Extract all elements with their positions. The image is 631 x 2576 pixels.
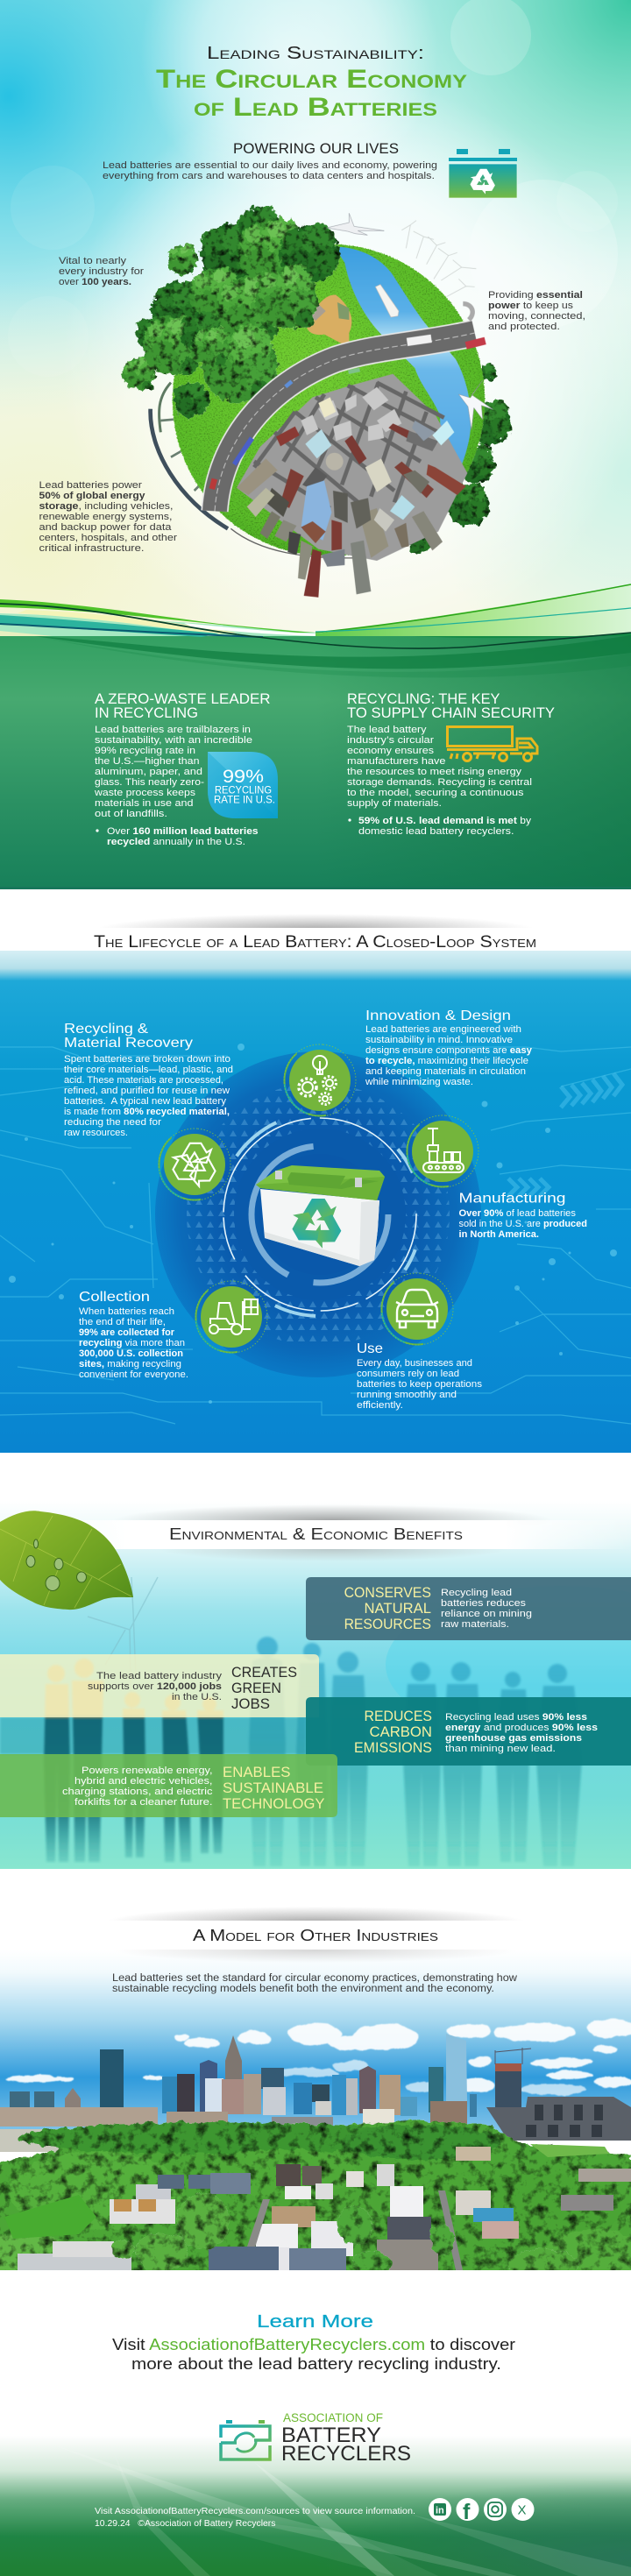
panel: conserves natural resources: reliance on mining (441, 1609, 532, 1619)
forest (123, 207, 339, 418)
text: manufacturing: in North America. (459, 1229, 539, 1240)
text: innovation and design: sustainability in mind. Innovative (365, 1035, 513, 1045)
panel: conserves natural resources: CONSERVES (344, 1584, 431, 1601)
callout: global energy storage (39, 480, 177, 554)
text: recycling and material recovery: Material Recovery (64, 1036, 193, 1051)
text: manufacturing: Manufacturing (459, 1192, 566, 1206)
logo: association of battery recyclers: BATTERY (281, 2424, 381, 2447)
callout: global energy storage: centers, hospitals, and other (39, 533, 177, 543)
text: innovation and design: to recycle, maximizing their lifecycle (365, 1056, 528, 1066)
text: recycling and material recovery: acid. These materials are processed, (64, 1075, 223, 1086)
callout: global energy storage: Lead batteries power (39, 480, 142, 491)
diagram: closed-loop ring (155, 1051, 481, 1377)
circuit nodes (9, 1044, 617, 1404)
icon: instagram (484, 2498, 507, 2521)
heading (95, 691, 271, 721)
text block: powering intro: Lead batteries are essential to our daily lives and economy, powering (103, 160, 437, 171)
body text: Lead batteries are trailblazers in (95, 725, 251, 735)
panel: conserves natural resources: raw materials. (441, 1619, 509, 1630)
node: manufacturing (397, 1106, 488, 1197)
panel: reduces carbon emissions: than mining new lead. (445, 1744, 556, 1754)
icon: conveyor (423, 1129, 464, 1172)
heading: IN RECYCLING (95, 705, 198, 721)
callout: essential power: Providing essential (488, 290, 583, 301)
text: manufacturing (459, 1192, 587, 1240)
source note: Visit AssociationofBatteryRecyclers.com/sources to view source information. (95, 2507, 415, 2516)
rail viaduct (151, 383, 362, 558)
callout: essential power (488, 290, 585, 332)
panel: enables sustainable technology: Powers renewable energy, (82, 1766, 212, 1776)
node: innovation and design (274, 1035, 365, 1126)
call to action (112, 2335, 515, 2373)
text: collection: When batteries reach (79, 1306, 174, 1317)
node: recycling (149, 1119, 240, 1210)
call to action: Visit AssociationofBatteryRecyclers.com to discover (112, 2335, 515, 2353)
callout: essential power: power to keep us (488, 301, 574, 311)
panel: reduces carbon emissions: greenhouse gas emissions (445, 1733, 582, 1744)
panel: creates green jobs: GREEN (231, 1680, 281, 1696)
body text: economy ensures (347, 746, 435, 756)
text: collection: convenient for everyone. (79, 1369, 188, 1380)
road vehicles (209, 335, 486, 490)
text: innovation and design: while minimizing waste. (365, 1077, 473, 1087)
callout: global energy storage: and backup power for data (39, 522, 173, 533)
logo: association of battery recyclers (221, 2411, 411, 2466)
callout: global energy storage: critical infrastructure. (39, 543, 144, 554)
text: collection: recycling via more than (79, 1338, 185, 1348)
source note (95, 2507, 415, 2529)
panel: lifecycle (0, 951, 631, 1453)
heading band: Environmental & Economic Benefits (169, 1525, 463, 1543)
text: collection: 300,000 U.S. collection (79, 1348, 183, 1359)
panel: creates green jobs: supports over 120,000 jobs (88, 1681, 222, 1692)
badge: 99%: RATE IN U.S. (214, 796, 275, 806)
icon: recycling battery (449, 149, 517, 198)
foreground trees (111, 2192, 580, 2270)
text: use: efficiently. (357, 1400, 403, 1411)
city block and skyscrapers (237, 374, 467, 598)
planet sphere (173, 244, 485, 556)
badge: 99%: RECYCLING (215, 785, 272, 796)
text: recycling and material recovery: is made from 80% recycled material, (64, 1107, 230, 1117)
icon: recycling arrows (168, 1143, 219, 1189)
chevrons (508, 1073, 622, 1196)
body text: storage demands. Recycling is central (347, 777, 532, 788)
text: collection (79, 1290, 188, 1380)
body text: industry’s circular (347, 735, 434, 746)
callout: essential power: moving, connected, (488, 311, 585, 322)
callout: essential power: and protected. (488, 322, 560, 332)
callout: vital: Vital to nearly (59, 256, 127, 266)
panel: hero background (0, 0, 631, 633)
text block: powering intro (103, 160, 437, 181)
body text: to the model, securing a continuous (347, 788, 524, 798)
panel: reduces carbon emissions: energy and produces 90% less (445, 1723, 598, 1733)
wave ribbon (0, 584, 631, 677)
source note: 10.29.24 ©Association of Battery Recyclers (95, 2519, 276, 2529)
airplanes (327, 213, 493, 430)
node: collection (186, 1271, 277, 1362)
text: recycling and material recovery: batteries. A typical new lead battery (64, 1096, 227, 1107)
panel: enables sustainable technology: SUSTAINABLE (223, 1780, 323, 1796)
body text: waste process keeps (94, 788, 196, 798)
bullet: 59% of U.S. lead demand is met by (358, 816, 532, 826)
panel: conserves natural resources (306, 1577, 631, 1640)
text: innovation and design: Lead batteries are engineered with (365, 1024, 521, 1035)
heading: A ZERO-WASTE LEADER (95, 691, 271, 707)
panel: conserves natural resources: batteries reduces (441, 1598, 527, 1609)
text: recycling and material recovery (64, 1022, 233, 1138)
text: recycling and material recovery: Spent batteries are broken down into (64, 1054, 230, 1065)
bullet (96, 826, 259, 847)
callout: vital: every industry for (59, 266, 144, 277)
text: innovation and design: Innovation & Design (365, 1008, 511, 1023)
callout: global energy storage: renewable energy systems, (39, 512, 172, 522)
heading band: lifecycle (0, 914, 631, 954)
text: manufacturing: Over 90% of lead batteries (459, 1208, 576, 1219)
panel: reduces carbon emissions: Recycling lead uses 90% less (445, 1712, 587, 1723)
text: use: batteries to keep operations (357, 1379, 483, 1390)
bullet (348, 816, 532, 837)
panel: recycling and supply chain (0, 584, 631, 889)
heading band (0, 1907, 631, 1963)
text block: model intro: Lead batteries set the standard for circular economy practices, demonstrating how (112, 1973, 518, 1984)
body text: supply of materials. (347, 798, 442, 809)
body text: manufacturers have (347, 756, 445, 767)
heading (347, 691, 555, 721)
text: recycling and material recovery: refined, and purified for reuse in new (64, 1086, 230, 1096)
panel: reduces carbon emissions: REDUCES (365, 1708, 432, 1724)
text: collection: sites, making recycling (79, 1359, 181, 1369)
panel: creates green jobs (0, 1654, 319, 1717)
text: innovation and design (365, 1008, 533, 1087)
central battery (256, 1165, 385, 1266)
body text (94, 725, 252, 819)
back trees right (408, 364, 511, 554)
icon: truck (447, 727, 537, 761)
panel: enables sustainable technology: charging stations, and electric (62, 1787, 213, 1797)
text: collection: 99% are collected for (79, 1327, 175, 1338)
heading band: A Model for Other Industries (193, 1926, 438, 1944)
bullet: recycled annually in the U.S. (107, 837, 245, 847)
callout: vital (59, 256, 144, 287)
panel: creates green jobs: JOBS (231, 1695, 270, 1712)
panel: enables sustainable technology: forklifts for a cleaner future. (74, 1797, 212, 1808)
panel: enables sustainable technology (0, 1754, 337, 1817)
column: zero waste (94, 691, 278, 847)
circuit pattern (0, 1047, 631, 1424)
icon: logo battery (221, 2420, 270, 2459)
body text: materials in use and (95, 798, 193, 809)
text: recycling and material recovery: raw resources. (64, 1128, 128, 1138)
node: use (372, 1263, 463, 1355)
panel: conserves natural resources: NATURAL (365, 1600, 431, 1617)
body text: out of landfills. (95, 809, 167, 819)
text: innovation and design: designs ensure components are easy (365, 1045, 533, 1056)
text: collection: Collection (79, 1290, 150, 1305)
heading: RECYCLING: THE KEY (347, 691, 500, 707)
panel: enables sustainable technology: ENABLES (223, 1764, 291, 1780)
body text: glass. This nearly zero- (95, 777, 204, 788)
body text: aluminum, paper, and (95, 767, 202, 777)
text: manufacturing: sold in the U.S. are produced (459, 1219, 587, 1229)
heading band (0, 1504, 631, 1561)
lawn (4, 2195, 96, 2239)
wind turbines (401, 221, 476, 296)
heading: learn more: Learn More (257, 2312, 373, 2332)
text: recycling and material recovery: reducing the need for (64, 1117, 161, 1128)
text: use (357, 1341, 483, 1411)
bullet: Over 160 million lead batteries (107, 826, 259, 837)
column: supply chain (347, 691, 555, 837)
panel: creates green jobs: The lead battery industry (96, 1671, 223, 1681)
bullet: domestic lead battery recyclers. (358, 826, 514, 837)
text: use: Every day, businesses and (357, 1358, 472, 1369)
body text (347, 725, 532, 809)
callout: global energy storage: 50% of global energy (39, 491, 145, 501)
panel: footer background (0, 2436, 631, 2576)
icon: facebook: f (463, 2500, 471, 2524)
panel: enables sustainable technology: hybrid and electric vehicles, (74, 1776, 212, 1787)
title (156, 44, 467, 122)
tree canopy (0, 2120, 631, 2282)
text: use: consumers rely on lead (357, 1369, 459, 1379)
text: use: Use (357, 1341, 383, 1356)
panel: reduces carbon emissions: CARBON (370, 1723, 432, 1740)
badge: 99% (208, 752, 278, 818)
learn more (112, 2312, 515, 2373)
badge: 99%: 99% (223, 767, 264, 787)
body text: 99% recycling rate in (95, 746, 195, 756)
text: recycling and material recovery: their core materials—lead, plastic, and (64, 1065, 233, 1075)
text: collection: the end of their life, (79, 1317, 166, 1327)
body text: the U.S.—higher than (95, 756, 200, 767)
houses (18, 2147, 631, 2271)
icon: x: X (517, 2502, 527, 2518)
skyline (0, 2034, 631, 2152)
logo: association of battery recyclers: RECYCLERS (281, 2442, 411, 2466)
clouds (7, 2020, 631, 2096)
elevated highway (215, 304, 475, 511)
heading band: lifecycle: The Lifecycle of a Lead Battery: A Closed-Loop System (94, 933, 536, 952)
icon: car (396, 1290, 438, 1327)
panel: creates green jobs: in the U.S. (172, 1692, 222, 1702)
panel: a model for other industries, city photo (0, 1907, 631, 2282)
logo: association of battery recyclers: ASSOCIATION OF (283, 2411, 383, 2424)
leaf with water drops (0, 1511, 133, 1610)
text: recycling and material recovery: Recycling & (64, 1022, 148, 1037)
heading: powering our lives: POWERING OUR LIVES (233, 141, 399, 157)
panel: conserves natural resources: RESOURCES (344, 1616, 431, 1632)
text block: model intro: sustainable recycling models benefit both the environment and the economy. (112, 1984, 494, 1994)
callout: vital: over 100 years. (59, 277, 131, 287)
title: of Lead Batteries (194, 93, 437, 122)
title: The Circular Economy (156, 65, 467, 94)
callout: global energy storage: storage , including vehicles, (39, 501, 174, 512)
social icons (429, 2498, 535, 2524)
body text: sustainability, with an incredible (95, 735, 252, 746)
text: innovation and design: and keeping materials in circulation (365, 1066, 526, 1077)
illustration: miniature globe (123, 207, 511, 598)
text: use: running smoothly and (357, 1390, 457, 1400)
river (335, 247, 471, 541)
ship (375, 285, 399, 317)
icon: linkedin: in (436, 2506, 444, 2516)
panel: enables sustainable technology: TECHNOLOGY (223, 1795, 324, 1812)
panel: reduces carbon emissions (306, 1697, 631, 1766)
wind turbine ghost (88, 1577, 158, 1717)
heading: TO SUPPLY CHAIN SECURITY (347, 705, 555, 721)
icon: gears and bulb (299, 1056, 337, 1104)
title: Leading Sustainability: (207, 44, 424, 63)
icon: forklift (209, 1299, 258, 1334)
panel: conserves natural resources: Recycling lead (441, 1588, 512, 1598)
panel: reduces carbon emissions: EMISSIONS (354, 1739, 432, 1756)
text block: powering intro: everything from cars and warehouses to data centers and hospitals. (103, 171, 435, 181)
panel: environmental and economic benefits (0, 1501, 631, 1869)
panel: creates green jobs: CREATES (231, 1664, 297, 1681)
body text: The lead battery (347, 725, 427, 735)
sand patch and houses (307, 295, 351, 348)
body text: the resources to meet rising energy (347, 767, 522, 777)
call to action: more about the lead battery recycling industry. (131, 2354, 501, 2373)
text block: model intro (112, 1973, 518, 1994)
silhouettes of workers (0, 1637, 582, 1866)
